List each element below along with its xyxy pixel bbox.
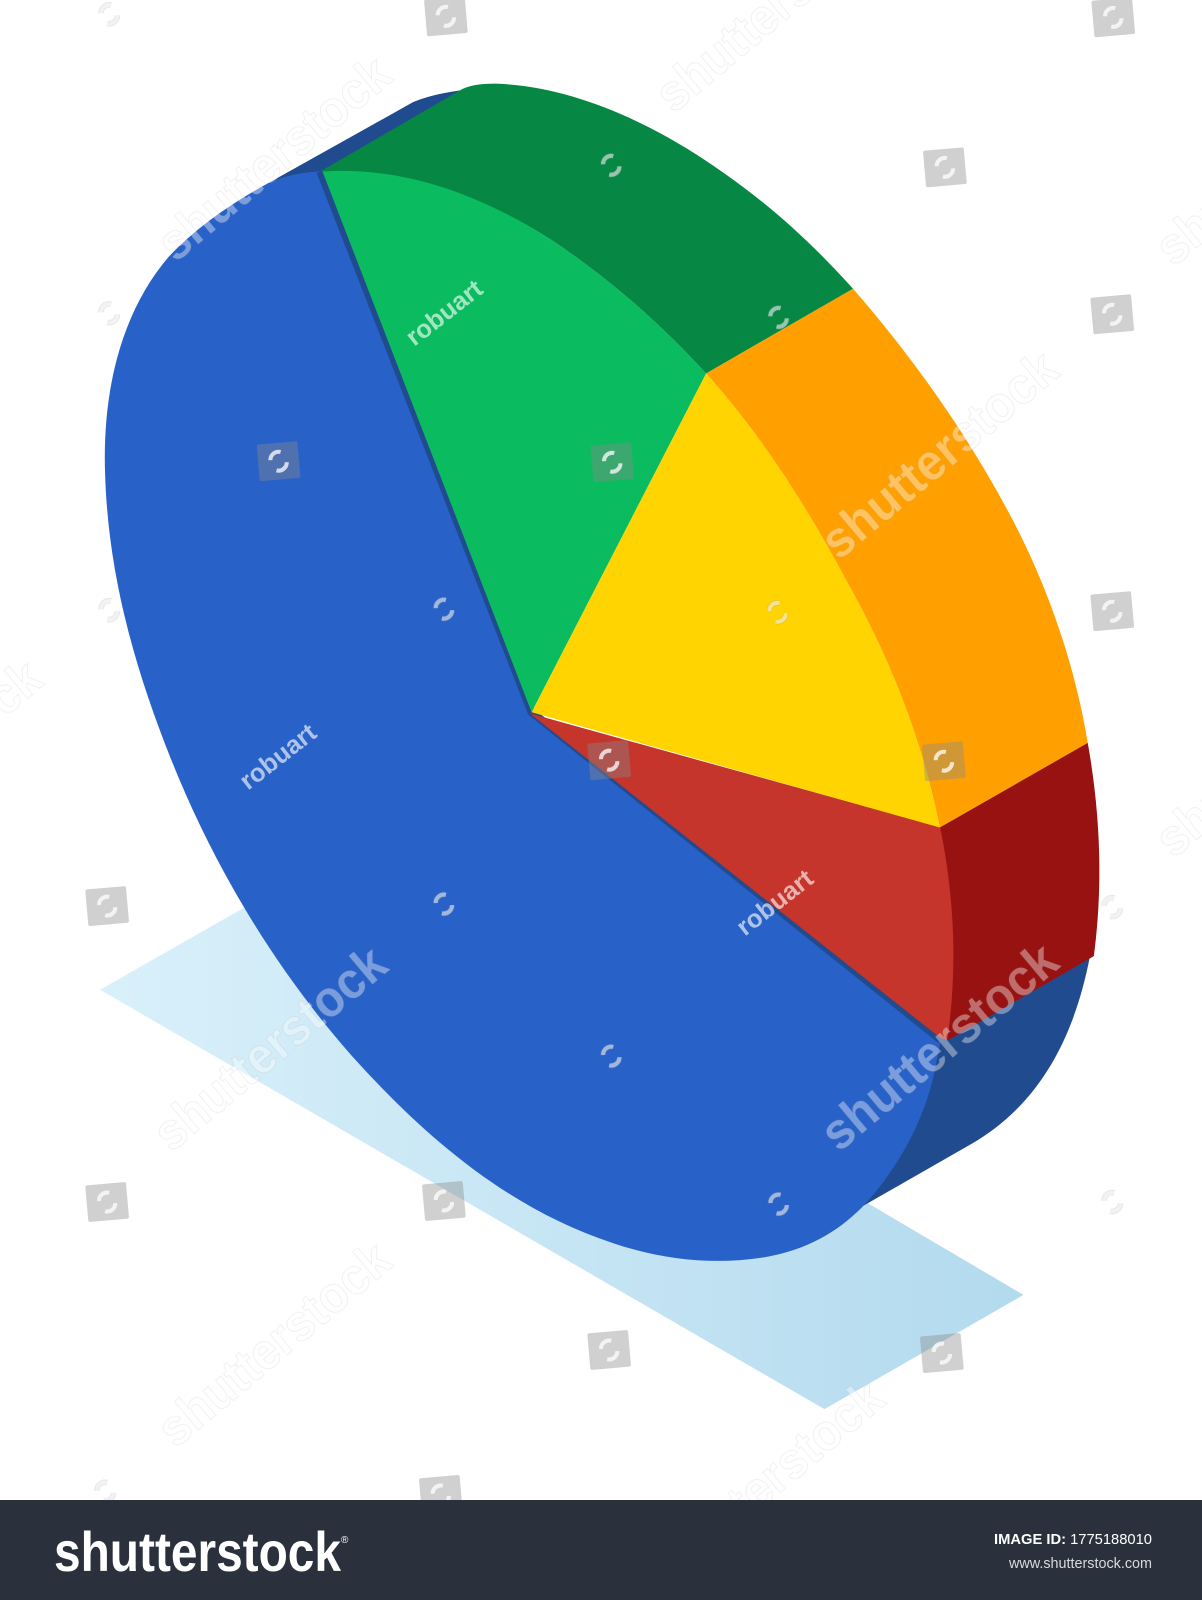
- watermark: shutterstock repeats: shutterstock: [146, 1230, 402, 1457]
- watermark: robuart repeats: robuart: [731, 864, 819, 941]
- watermark: robuart repeats: robuart: [234, 718, 322, 796]
- back rim: dark blue top edge: [267, 89, 474, 184]
- slice: orange rim: [706, 289, 1088, 828]
- slice: green rim: [320, 84, 853, 373]
- watermark: small logo marks: [97, 5, 1120, 1501]
- footer registered mark: ®: [341, 1535, 349, 1546]
- watermark: robuart repeats: [234, 274, 819, 941]
- watermark: shutterstock repeats: shutterstock: [809, 339, 1069, 570]
- watermark: shutterstock repeats: shutterstock: [146, 44, 402, 272]
- slice edge: dark blue inner edge: [320, 171, 941, 1040]
- watermark: shutterstock repeats: shutterstock: [639, 1367, 895, 1595]
- slice: red face: [532, 714, 953, 1039]
- slice: dark red rim: [940, 743, 1099, 1041]
- watermark: robuart repeats: robuart: [401, 274, 489, 352]
- footer bar: [0, 1500, 1202, 1600]
- slice: blue face: [105, 171, 941, 1261]
- footer website: www.shutterstock.com: [1008, 1555, 1152, 1572]
- floor shadow: [100, 872, 1023, 1409]
- watermark: shutterstock repeats: shutterstock: [809, 931, 1069, 1161]
- slice: yellow face: [532, 373, 940, 828]
- slice: green face: [322, 171, 706, 712]
- watermark: shutterstock repeats: shutterstock: [142, 934, 398, 1161]
- back rim: dark blue lower edge: [852, 957, 1090, 1212]
- footer image id: IMAGE ID: 1775188010: [994, 1531, 1152, 1548]
- footer logo: shutterstock: [54, 1520, 342, 1583]
